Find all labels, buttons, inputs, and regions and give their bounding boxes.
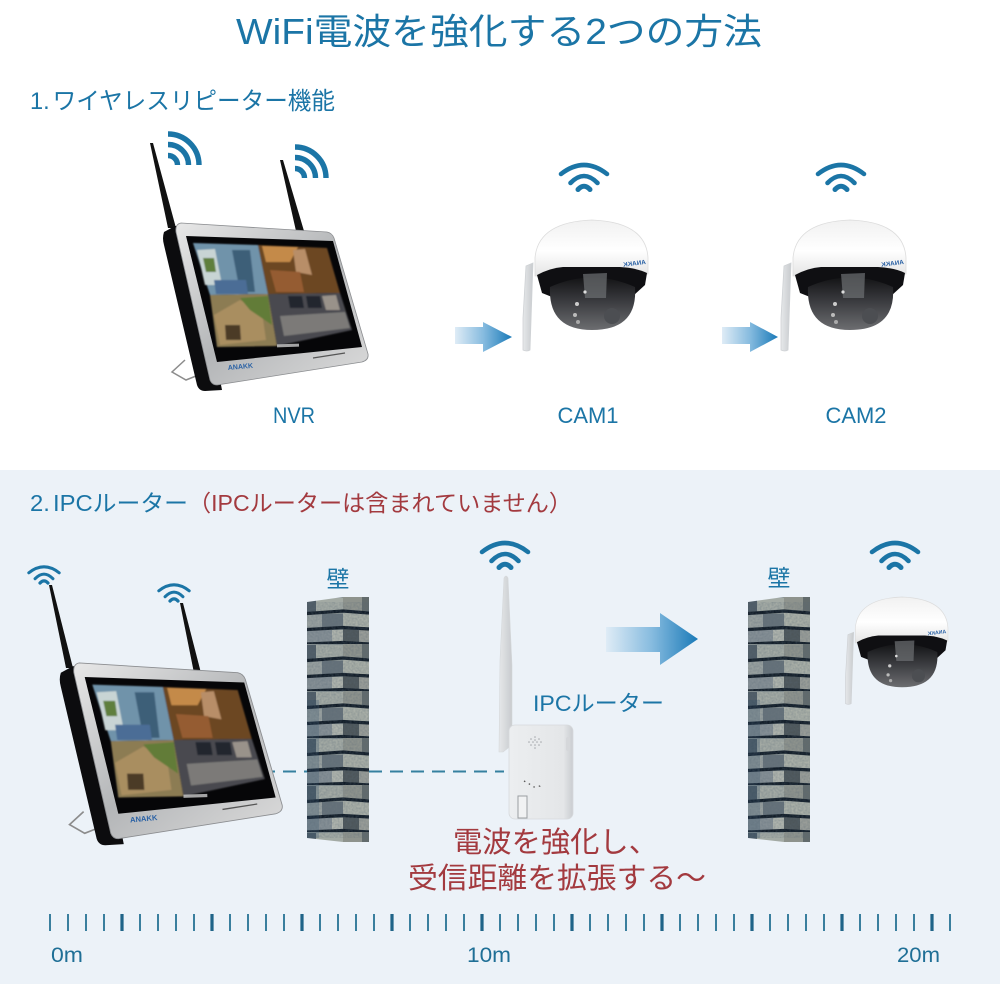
wifi icon: CAM2 (818, 165, 864, 190)
title: WiFi電波を強化する2つの方法 (236, 11, 762, 52)
arrow: to CAM1 (455, 322, 512, 352)
icon: NVR with antennas and wifi (150, 134, 368, 391)
camera: third (845, 597, 948, 704)
camera: CAM1 (523, 220, 648, 351)
label: wall 2: 壁 (768, 565, 790, 591)
ruler label: 10m: 10m (467, 944, 511, 967)
label: CAM2: CAM2 (826, 403, 886, 428)
heading note: router not included: （IPCルーターは含まれていません） (188, 490, 572, 516)
router (499, 576, 573, 819)
callout: extend range: 受信距離を拡張する～ (408, 862, 706, 895)
label: NVR: NVR (273, 403, 315, 428)
ruler label: 20m: 20m (897, 944, 940, 967)
heading: IPC router: 2.IPCルーター (30, 490, 188, 516)
label: CAM1: CAM1 (558, 403, 618, 428)
ruler ticks (50, 914, 950, 931)
wall 1 (307, 597, 369, 842)
heading: wireless repeater: 1.ワイヤレスリピーター機能 (30, 88, 335, 115)
wifi icon: CAM1 (561, 165, 607, 190)
link: dashed line NVR to router (262, 770, 504, 772)
icon: NVR second with antennas and wifi (29, 567, 282, 845)
panel: IPC router section background (0, 470, 1000, 984)
arrow: big (606, 613, 698, 665)
callout: extend range: 電波を強化し、 (453, 826, 658, 859)
wifi icon: router (482, 543, 528, 568)
arrow: to CAM2 (722, 322, 778, 352)
label: wall 1: 壁 (326, 566, 350, 592)
ruler label: 0m: 0m (51, 944, 83, 967)
label: IPC router: IPCルーター (533, 691, 664, 716)
callout: extend range (408, 826, 706, 895)
wifi icon: camera 3 (872, 543, 918, 568)
wall 2 (748, 597, 810, 842)
camera: CAM2 (781, 220, 906, 351)
